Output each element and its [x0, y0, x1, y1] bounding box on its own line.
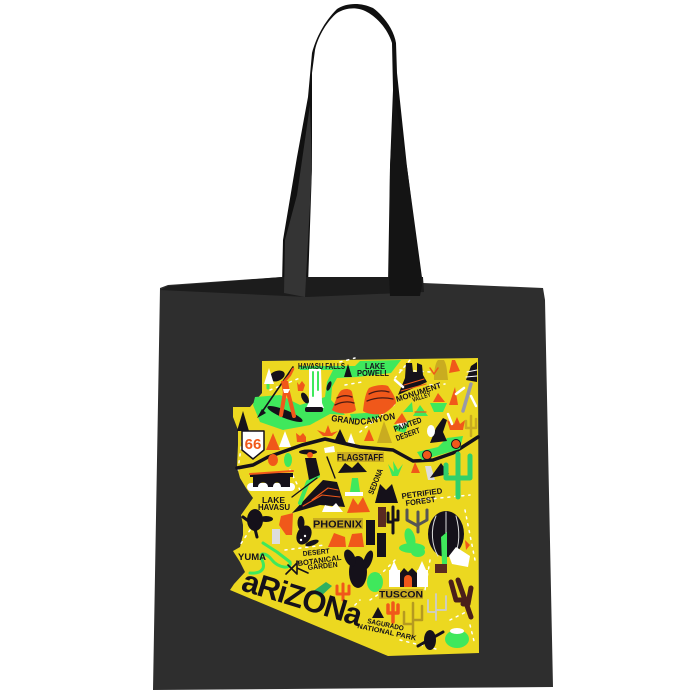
waterfall	[305, 369, 324, 412]
place labels: TUSCON	[379, 590, 423, 600]
place labels: PAINTED	[393, 415, 423, 434]
place labels: FOREST	[405, 495, 436, 508]
bars and cacti centre	[366, 507, 427, 557]
map outline	[230, 358, 479, 656]
mesas and small Sedona icons	[338, 461, 449, 513]
texture dots	[238, 358, 475, 650]
place labels: SAGURADO	[367, 618, 405, 633]
place labels: PHOENIX	[313, 520, 362, 530]
hot air balloon barrel	[428, 511, 470, 573]
place labels: NATIONAL PARK	[357, 623, 417, 642]
bridge	[247, 471, 295, 491]
place labels: MONUMENT	[395, 381, 442, 404]
rock formations: Grand Canyon	[332, 385, 396, 414]
title: Arizona: aRiZONa	[238, 563, 367, 633]
place labels: YUMA	[238, 552, 267, 562]
place labels: BOTANICAL	[297, 553, 342, 568]
car and driver	[417, 418, 463, 460]
icon: paddle boarder	[257, 367, 304, 425]
bag body	[153, 277, 553, 690]
place labels: LAKE	[365, 362, 386, 371]
place labels: PETRIFIED	[401, 486, 443, 501]
handle front strip	[284, 105, 312, 297]
right handle strap front	[389, 95, 422, 296]
road	[237, 437, 478, 468]
mesas near Phoenix	[328, 533, 364, 547]
flame and leaf icons near waterfall	[268, 378, 333, 405]
hiker on mountain	[292, 446, 345, 513]
place labels: FLAGSTAFF	[337, 452, 383, 462]
place labels: HAVASU FALLS	[298, 362, 346, 371]
place labels: DESERT	[302, 548, 331, 558]
big green cactus	[446, 454, 470, 497]
place labels: POWELL	[357, 369, 389, 378]
mission church	[389, 561, 428, 587]
place labels: CANYON	[360, 411, 396, 427]
place labels: GARDEN	[307, 560, 338, 572]
monument valley rocks	[398, 363, 427, 395]
place labels: DESERT	[395, 426, 421, 443]
lower cacti	[286, 548, 471, 650]
place labels	[238, 362, 443, 642]
bag handle back	[282, 4, 423, 285]
place labels: SEDONA	[367, 467, 385, 496]
place labels: LAKE	[262, 496, 286, 505]
route 66 shield	[242, 431, 264, 459]
bag opening shadow	[160, 277, 424, 297]
Arizona map	[230, 358, 479, 656]
left cacti	[243, 509, 319, 548]
lakes and river	[253, 360, 413, 433]
place labels: GRAND	[331, 413, 361, 427]
balloons	[268, 453, 292, 467]
place labels: VALLEY	[411, 391, 432, 404]
route 66 shield: 66	[245, 436, 261, 453]
trees row	[237, 364, 392, 450]
snake	[250, 543, 290, 573]
place labels: HAVASU	[258, 503, 290, 512]
top right icons	[394, 360, 477, 436]
